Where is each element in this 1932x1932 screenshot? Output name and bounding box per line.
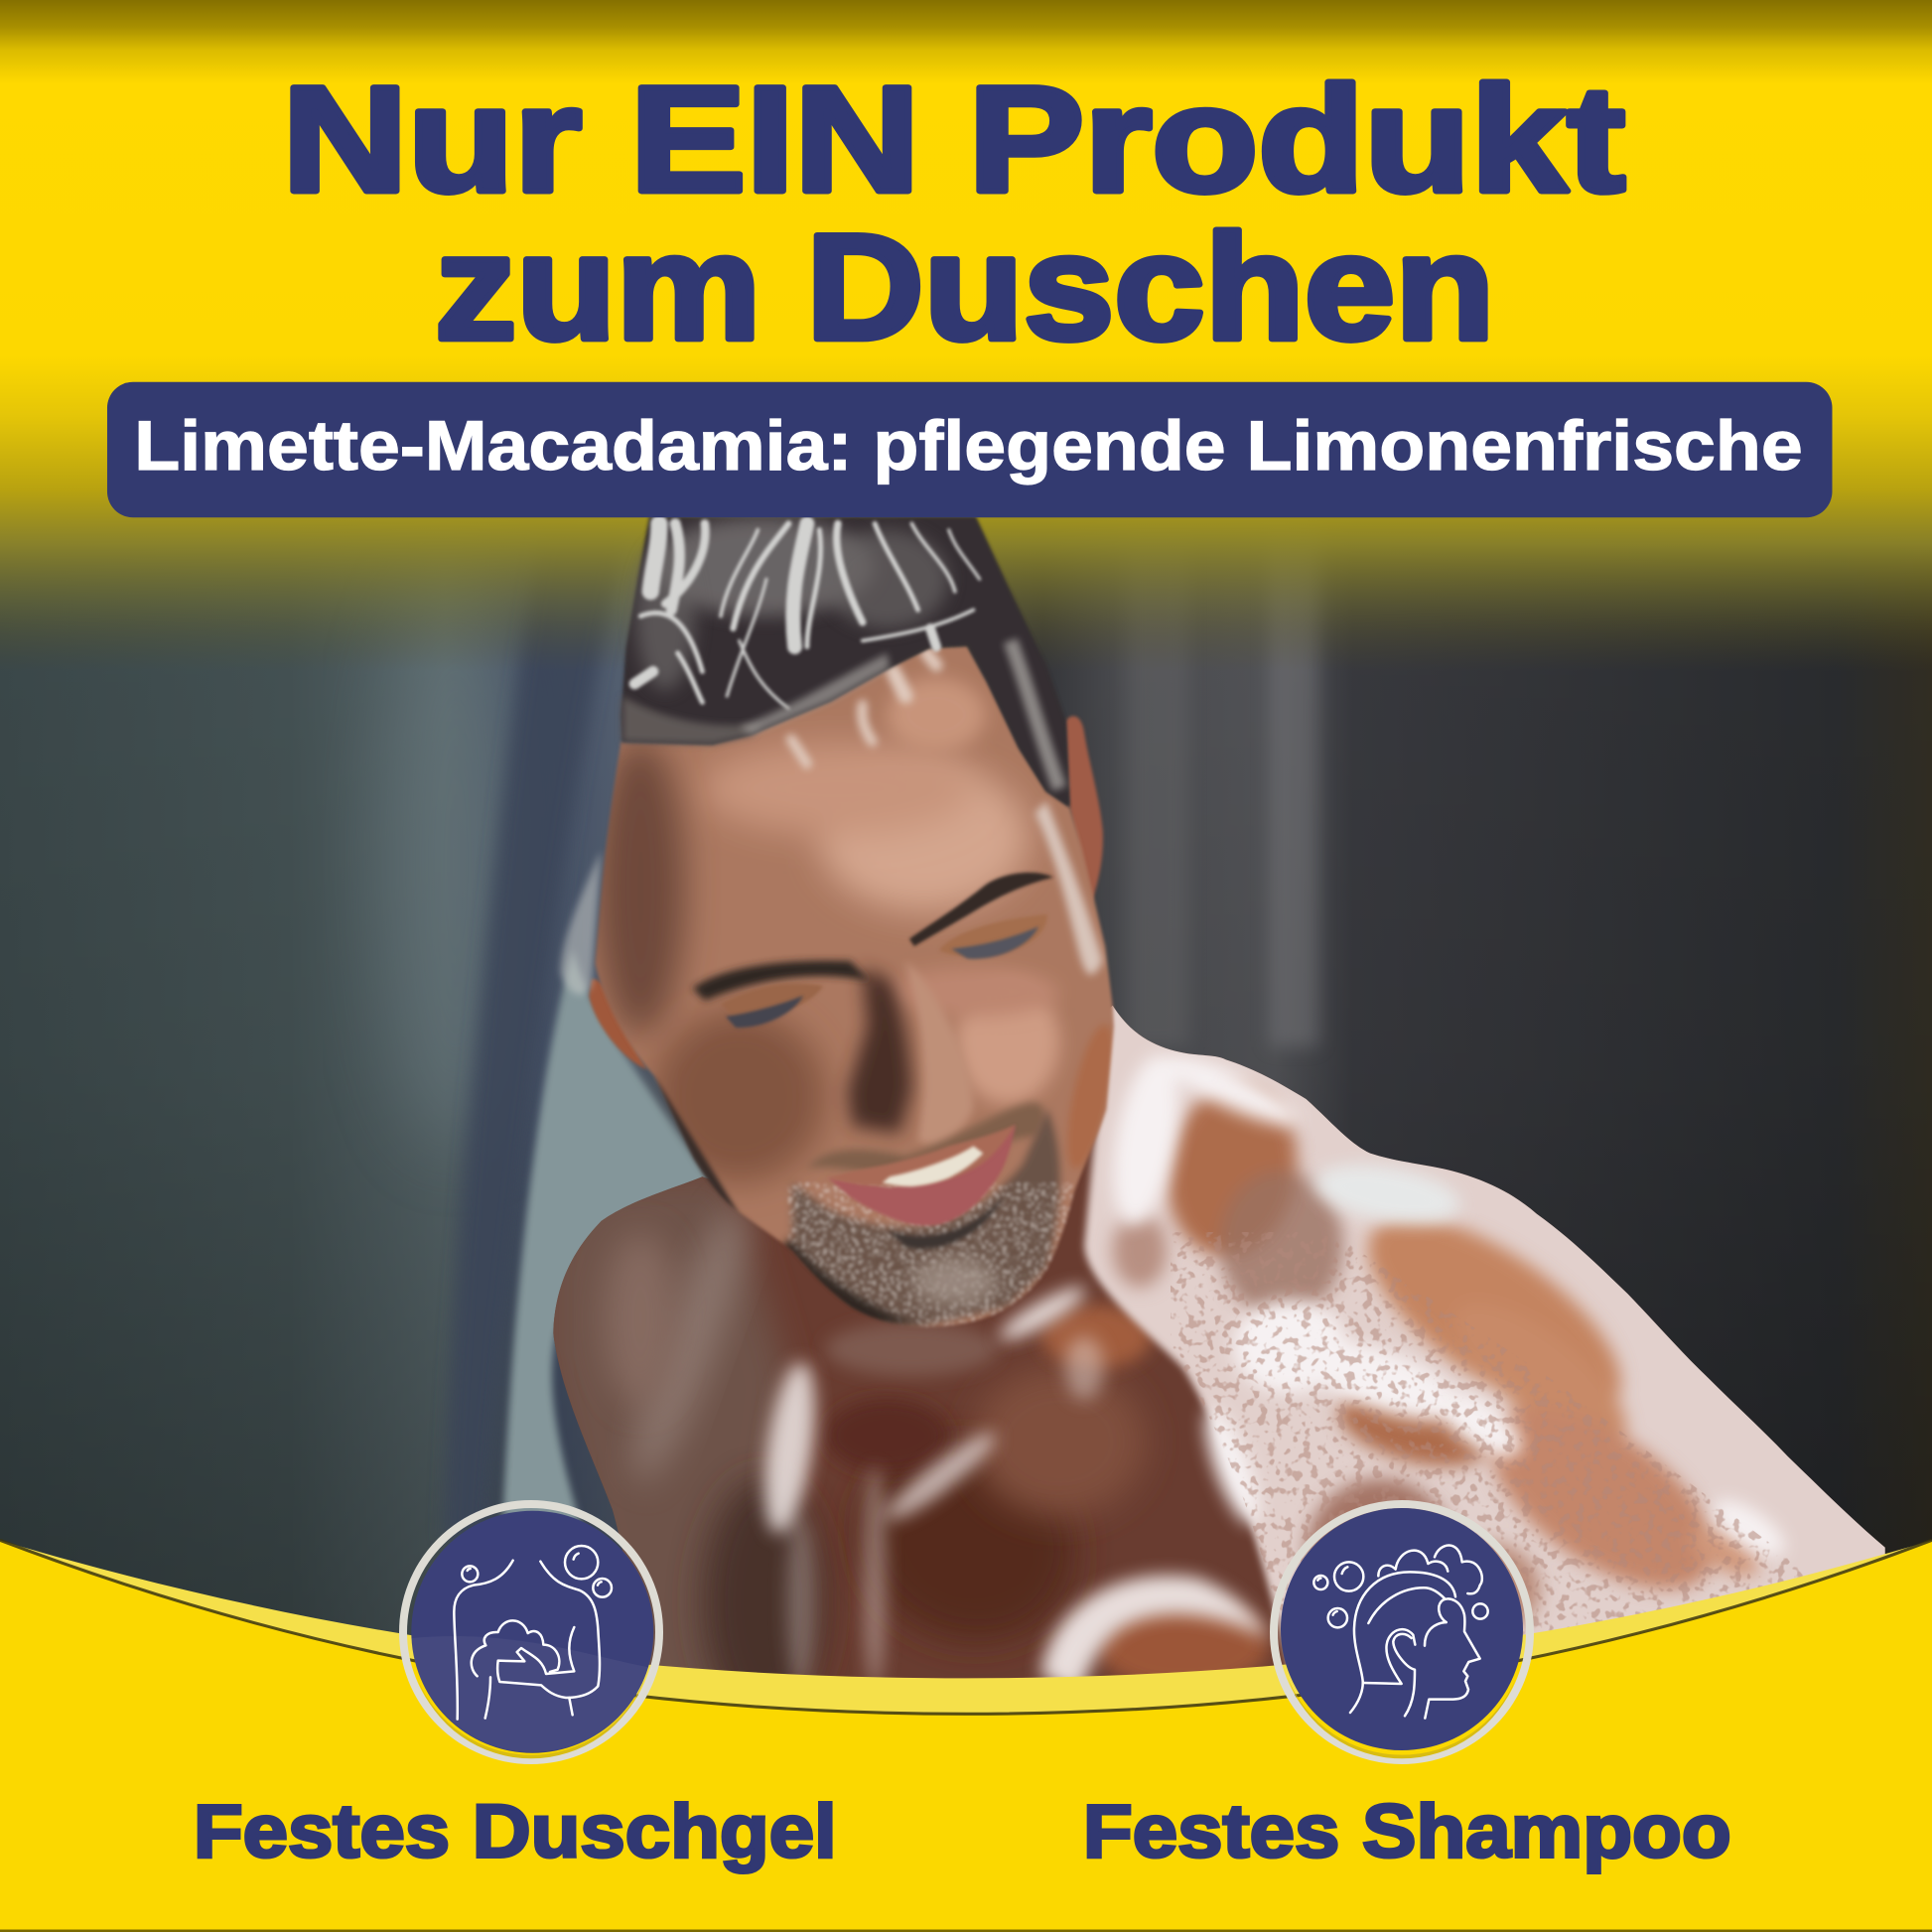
icon badge: shampoo: [1274, 1504, 1530, 1760]
photo: right ear: [1066, 716, 1103, 905]
icon: head with shampoo foam: [1313, 1545, 1488, 1719]
band shadow line: [0, 1540, 1932, 1714]
photo: shower background: [0, 369, 1932, 1762]
chin beard: [792, 1109, 1060, 1327]
title: [282, 56, 1625, 371]
photo: man's face: [579, 628, 1134, 1343]
chest foam: [756, 1279, 1269, 1694]
foam stripe on temple: [1035, 801, 1103, 975]
lower lip: [828, 1125, 1016, 1225]
bottom edge line: [0, 1930, 1932, 1932]
photo: left ear: [589, 979, 647, 1069]
bottom yellow section: [0, 1540, 1932, 1932]
shampoo strands: [634, 523, 980, 709]
foam bubble texture: [1171, 1232, 1803, 1634]
right eyebrow: [909, 873, 1053, 946]
label: Festes Duschgel: Festes Duschgel: [194, 1789, 837, 1873]
subtitle text: Limette-Macadamia: pflegende Limonenfrische: [134, 406, 1803, 484]
forehead foam drips: [791, 653, 936, 763]
right shoulder foam base: [1078, 1006, 1885, 1664]
mustache: [807, 1102, 1043, 1176]
photo: hair with shampoo: [621, 516, 1069, 807]
right eye: [951, 926, 1038, 959]
right eyelid: [940, 914, 1047, 957]
title line 2: zum Duschen: [435, 204, 1494, 371]
yellow fade header background: [0, 0, 1932, 671]
photo: white wall strip near head: [561, 850, 602, 995]
grey hair mass: [653, 517, 875, 617]
left eyelid: [721, 984, 823, 1023]
glass sheen: [411, 1636, 652, 1752]
teeth: [883, 1146, 983, 1186]
grey hair sheen: [622, 696, 763, 745]
nose lit: [905, 961, 973, 1145]
icon badge: shower gel: [403, 1504, 659, 1760]
white foam patches: [1102, 1043, 1794, 1566]
icon: body washing with foam: [454, 1546, 612, 1720]
left shoulder: [554, 1177, 790, 1670]
shoulder skin patches: [1113, 1074, 1765, 1639]
upper lip: [828, 1125, 1016, 1185]
nose shadow: [848, 967, 911, 1134]
subtitle banner: [107, 382, 1832, 517]
light yellow curved band: [0, 1540, 1932, 1714]
chest shading: [845, 1440, 1090, 1646]
photo: man's body with foam: [553, 1005, 1885, 1678]
left eyebrow: [692, 961, 870, 1001]
label: Festes Shampoo: Festes Shampoo: [1083, 1789, 1731, 1873]
jaw edge stubble: [654, 1075, 788, 1251]
left eye: [726, 996, 803, 1028]
title line 1: Nur EIN Produkt: [282, 56, 1625, 223]
